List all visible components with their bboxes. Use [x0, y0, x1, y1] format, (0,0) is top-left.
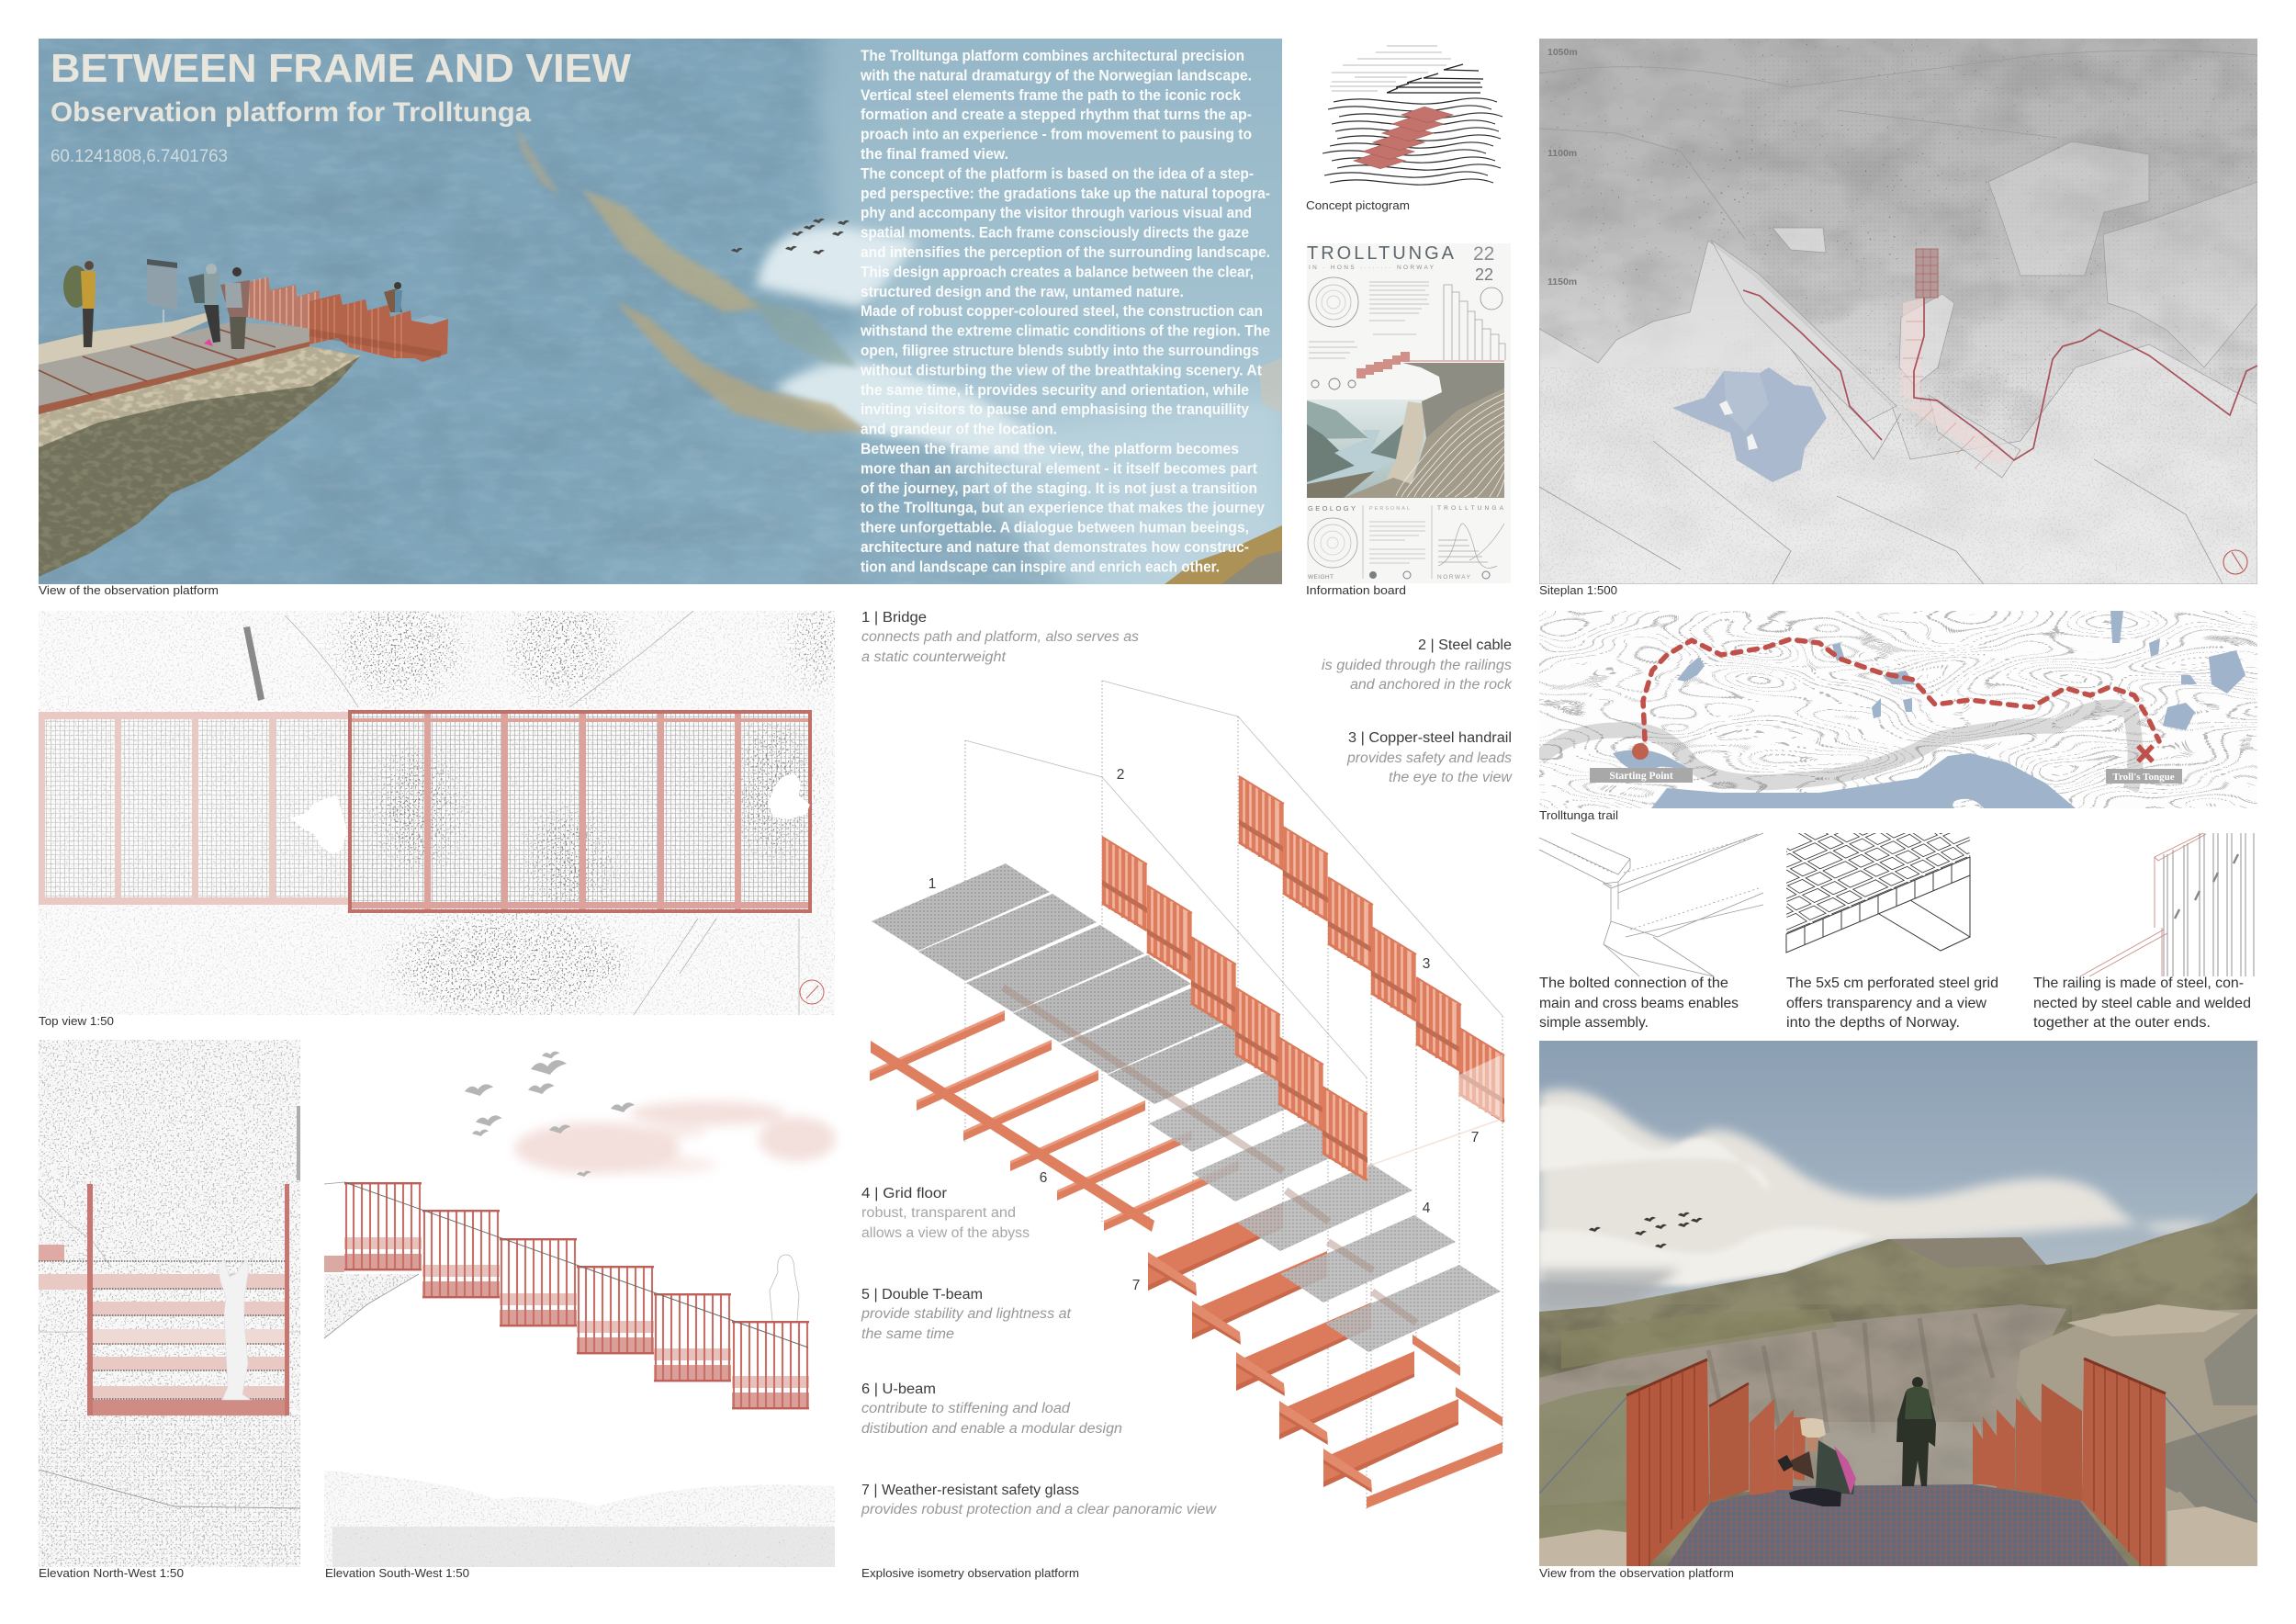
platform on site plan — [1916, 249, 1938, 298]
label: troll's tongue: Troll's Tongue — [2112, 772, 2175, 783]
legend: 6 U-beam — [861, 1382, 1122, 1437]
safety glass — [1459, 1054, 1503, 1121]
clouds — [1539, 1089, 2208, 1277]
panel: elevation south-west — [324, 1052, 836, 1567]
project description text: to the Trolltunga, but an experience that makes the journey — [861, 500, 1266, 516]
text: bolted connection: The bolted connection of the — [1539, 976, 1728, 991]
white human figure — [218, 1260, 251, 1400]
legend: 4 grid floor: robust, transparent and — [861, 1205, 1016, 1221]
part numbers — [929, 767, 1479, 1293]
text: railing: The railing is made of steel, con- — [2033, 976, 2244, 991]
steel U frame — [87, 1184, 289, 1415]
legend: 2 steel cable: 2 | Steel cable — [1418, 637, 1512, 653]
golden rock in the lower right corner — [1165, 525, 1282, 584]
long main beam — [871, 1041, 1154, 1232]
legend: 1 bridge — [861, 610, 1139, 665]
caption: top view: Top view 1:50 — [39, 1014, 114, 1028]
gray bench bar — [243, 626, 264, 701]
board lower columns — [1308, 504, 1504, 581]
project description text: there unforgettable. A dialogue between human beeings, — [861, 520, 1249, 536]
lower mountains — [324, 1471, 835, 1567]
left copper rail — [1102, 837, 1367, 1180]
bridge pale frame — [39, 712, 349, 905]
text: railing — [2033, 976, 2251, 1031]
left copper rail — [1626, 1359, 1806, 1566]
legend: 5 T-beam: provide stability and lightness at — [861, 1306, 1072, 1322]
board lower columns: TROLLTUNGA — [1437, 505, 1504, 512]
project description text: the same time, it provides security and orientation, while — [861, 382, 1249, 399]
caption: elevation north-west: Elevation North-West 1:50 — [39, 1566, 184, 1580]
route dashes — [1643, 639, 2159, 741]
top view north mark — [800, 980, 824, 1004]
panel: elevation north-west — [39, 1040, 300, 1567]
part numbers: 3 — [1423, 956, 1430, 972]
rocks on the right — [2016, 1309, 2257, 1566]
panel: information board: 22 — [1475, 265, 1493, 284]
start marker — [1632, 743, 1649, 760]
panel: site plan — [1539, 39, 2257, 584]
legend: 4 grid floor: 4 | Grid floor — [861, 1186, 947, 1201]
project description text: without disturbing the view of the breathtaking scenery. At — [860, 362, 1262, 378]
end beams — [1367, 1335, 1503, 1508]
text: steel grid: offers transparency and a view — [1786, 996, 1986, 1011]
caption: hero: View of the observation platform — [39, 583, 219, 597]
board lower columns: GEOLOGY — [1308, 504, 1356, 513]
panel: trail map — [1539, 611, 2257, 808]
board salmon steps — [1356, 352, 1410, 378]
trail route — [1743, 290, 2257, 460]
outline human — [770, 1255, 799, 1321]
elevation labels: 1100m — [1548, 148, 1577, 159]
board fjord image — [1307, 400, 1504, 498]
cliff band — [1539, 1304, 2066, 1506]
legend: 7 safety glass: provides robust protection and a clear panoramic view — [861, 1502, 1218, 1517]
part numbers: 1 — [929, 876, 936, 892]
legend: 2 steel cable — [1322, 637, 1513, 693]
title: BETWEEN FRAME AND VIEW — [51, 46, 631, 91]
elevation labels: 1050m — [1548, 47, 1578, 58]
board radial diagram — [1309, 277, 1503, 327]
part numbers: 7 — [1132, 1278, 1140, 1293]
platform mesh — [349, 710, 812, 913]
legend: 7 safety glass: 7 | Weather-resistant safety glass — [861, 1483, 1079, 1498]
right copper rail — [1239, 776, 1504, 1122]
caption: site plan: Siteplan 1:500 — [1539, 583, 1617, 597]
board lower columns: WEIGHT — [1308, 574, 1334, 581]
project description text — [860, 48, 1270, 575]
part numbers: 4 — [1423, 1201, 1431, 1216]
grid floor — [1667, 1484, 2129, 1566]
white cloud behind ridge — [757, 226, 918, 308]
legend: 6 U-beam: 6 | U-beam — [861, 1382, 936, 1397]
small cross beams — [870, 1010, 1239, 1231]
legend: 6 U-beam: contribute to stiffening and load — [861, 1401, 1071, 1416]
copper stepped railings — [245, 277, 448, 362]
top view stipple — [39, 611, 835, 1015]
project description text: more than an architectural element - it itself becomes part — [861, 460, 1257, 477]
caption: isometry: Explosive isometry observation platform — [861, 1566, 1079, 1580]
caption: view from platform: View from the observation platform — [1539, 1566, 1734, 1580]
project description text: and intensifies the perception of the surrounding landscape. — [861, 244, 1270, 261]
project description text: ped perspective: the gradations take up the natural topogra- — [861, 186, 1270, 202]
drawing: railing detail — [2080, 833, 2254, 976]
project description text: Vertical steel elements frame the path to the iconic rock — [861, 87, 1242, 104]
label: starting point: Starting Point — [1609, 771, 1673, 782]
label: troll's tongue — [2106, 769, 2182, 784]
legend: 2 steel cable: and anchored in the rock — [1350, 677, 1513, 693]
project description text: inviting visitors to pause and emphasising the tranquillity — [861, 401, 1250, 418]
panel: view from the platform — [1539, 1041, 2257, 1566]
legend: 3 handrail — [1346, 730, 1514, 785]
project description text: This design approach creates a balance between the clear, — [861, 264, 1254, 280]
boardwalk deck — [39, 321, 310, 414]
subtitle: Observation platform for Trolltunga — [51, 97, 531, 128]
blue lake — [1672, 367, 1827, 482]
project description text: and grandeur of the location. — [861, 422, 1057, 438]
label: starting point — [1590, 768, 1693, 783]
elevation labels: 1150m — [1548, 276, 1577, 288]
stipple — [39, 1040, 300, 1567]
text: railing: together at the outer ends. — [2033, 1015, 2211, 1031]
text: bolted connection: simple assembly. — [1539, 1015, 1649, 1031]
panel: top view — [39, 611, 835, 1015]
legend: 3 handrail: the eye to the view — [1389, 770, 1514, 785]
distant light fjord and sky on the right — [811, 39, 1282, 584]
beam shadows through the panels — [1003, 987, 1416, 1323]
project description text: proach into an experience - from movement to pausing to — [861, 127, 1252, 143]
project description text: phy and accompany the visitor through various visual and — [861, 205, 1252, 221]
legend: 2 steel cable: is guided through the railings — [1322, 658, 1512, 673]
panel: information board — [1307, 243, 1511, 583]
pink clouds — [514, 1101, 836, 1174]
legend: 5 T-beam: the same time — [861, 1326, 954, 1342]
legend: 5 T-beam — [861, 1287, 1072, 1342]
path mesh bridge — [39, 712, 349, 905]
water bodies — [1613, 611, 2245, 808]
panel: hero view of the observation platform — [39, 39, 1282, 584]
sky — [1539, 1041, 2257, 1371]
board title: TROLLTUNGA — [1307, 243, 1455, 264]
text: bolted connection: main and cross beams enables — [1539, 996, 1739, 1011]
text: railing: nected by steel cable and welded — [2033, 996, 2251, 1011]
project description text: withstand the extreme climatic conditions of the region. The — [860, 323, 1270, 340]
rock tongue — [39, 312, 369, 579]
destination marker — [2138, 746, 2153, 761]
project description text: with the natural dramaturgy of the Norwegian landscape. — [860, 67, 1252, 84]
project description text: of the journey, part of the staging. It is not just a transition — [861, 480, 1257, 497]
contour lines — [1539, 611, 2257, 808]
caption: trail: Trolltunga trail — [1539, 808, 1618, 822]
icon: concept pictogram — [1322, 46, 1503, 185]
legend: 4 grid floor: allows a view of the abyss — [861, 1225, 1030, 1241]
legend: 3 handrail: 3 | Copper-steel handrail — [1348, 730, 1512, 746]
rock stipple at left — [324, 1274, 419, 1338]
projection lines — [965, 681, 1503, 1077]
mountain — [1539, 1192, 2257, 1566]
caption: concept pictogram: Concept pictogram — [1306, 198, 1410, 212]
drawing: steel grid detail — [1786, 776, 1970, 953]
bridge grid panels — [872, 863, 1286, 1104]
panel: information board: 22 — [1473, 243, 1494, 265]
panel: information board: IN · HONS ········ NORWAY — [1309, 265, 1435, 271]
board lower columns: PERSONAL — [1369, 506, 1410, 512]
birds — [731, 219, 850, 254]
birds — [1589, 1212, 1703, 1248]
project description text: formation and create a stepped rhythm that turns the ap- — [861, 107, 1252, 123]
text: steel grid — [1786, 976, 1998, 1031]
stepped railing modules — [344, 1182, 809, 1409]
project description text: structured design and the raw, untamed nature. — [861, 284, 1184, 300]
project description text: architecture and nature that demonstrates how construc- — [861, 539, 1249, 556]
legend: 1 bridge: 1 | Bridge — [861, 610, 927, 626]
pink beams and grid layers — [39, 1245, 285, 1400]
chart: explosive isometry — [870, 681, 1504, 1511]
legend: 4 grid floor — [861, 1186, 1030, 1241]
board stepped chart — [1444, 285, 1505, 360]
text: steel grid: into the depths of Norway. — [1786, 1015, 1960, 1031]
glass end — [1823, 1422, 1981, 1514]
foreground ground — [1539, 1506, 2257, 1566]
lower grid panels — [1149, 1065, 1501, 1352]
hero background: mountain flank — [39, 39, 1089, 584]
golden sunlit ridge strips — [582, 189, 762, 312]
legend: 5 T-beam: 5 | Double T-beam — [861, 1287, 983, 1303]
text: bolted connection — [1539, 976, 1739, 1031]
legend: 1 bridge: connects path and platform, also serves as — [861, 629, 1139, 645]
north arrow — [2223, 550, 2247, 574]
site plan stipple — [1539, 39, 2257, 584]
platform frame — [349, 712, 812, 912]
project description text: the final framed view. — [861, 146, 1008, 163]
part numbers: 6 — [1040, 1170, 1047, 1186]
legend: 7 safety glass — [861, 1483, 1218, 1517]
project description text: The concept of the platform is based on the idea of a step- — [861, 165, 1254, 182]
drawing: bolted connection detail — [1539, 833, 1763, 976]
project description text: Between the frame and the view, the platform becomes — [861, 441, 1239, 457]
project description text: tion and landscape can inspire and enrich each other. — [861, 558, 1220, 575]
project description text: The Trolltunga platform combines architectural precision — [861, 48, 1244, 64]
project description text: Made of robust copper-coloured steel, the construction can — [861, 303, 1263, 320]
right copper rail — [1973, 1359, 2166, 1566]
sitting hiker — [1777, 1418, 1856, 1506]
hikers and info board — [63, 259, 402, 349]
legend: 6 U-beam: distibution and enable a modular design — [861, 1421, 1122, 1437]
elevation labels — [1548, 47, 1578, 288]
double T beams — [1148, 1202, 1458, 1493]
gray cliff band — [1539, 707, 2135, 790]
board lower columns: NORWAY — [1437, 574, 1471, 581]
light terrain polygons — [1539, 141, 2257, 584]
lower lake reflection — [773, 363, 1102, 478]
caption: elevation south-west: Elevation South-West 1:50 — [325, 1566, 469, 1580]
project description text: open, filigree structure blends subtly into the surroundings — [861, 343, 1259, 359]
gray birds — [465, 1052, 635, 1177]
project description text: spatial moments. Each frame consciously directs the gaze — [861, 225, 1249, 242]
part numbers: 2 — [1117, 767, 1124, 783]
legend: 1 bridge: a static counterweight — [861, 649, 1007, 665]
caption: information board: Information board — [1306, 583, 1406, 597]
text: steel grid: The 5x5 cm perforated steel grid — [1786, 976, 1998, 991]
people seen from above — [289, 774, 810, 854]
part numbers: 7 — [1471, 1130, 1479, 1145]
steel cables — [1539, 1393, 2257, 1503]
standing hiker — [1896, 1377, 1936, 1486]
coordinates: 60.1241808,6.7401763 — [51, 147, 228, 166]
legend: 3 handrail: provides safety and leads — [1346, 750, 1512, 766]
steel cable line — [344, 1182, 808, 1348]
